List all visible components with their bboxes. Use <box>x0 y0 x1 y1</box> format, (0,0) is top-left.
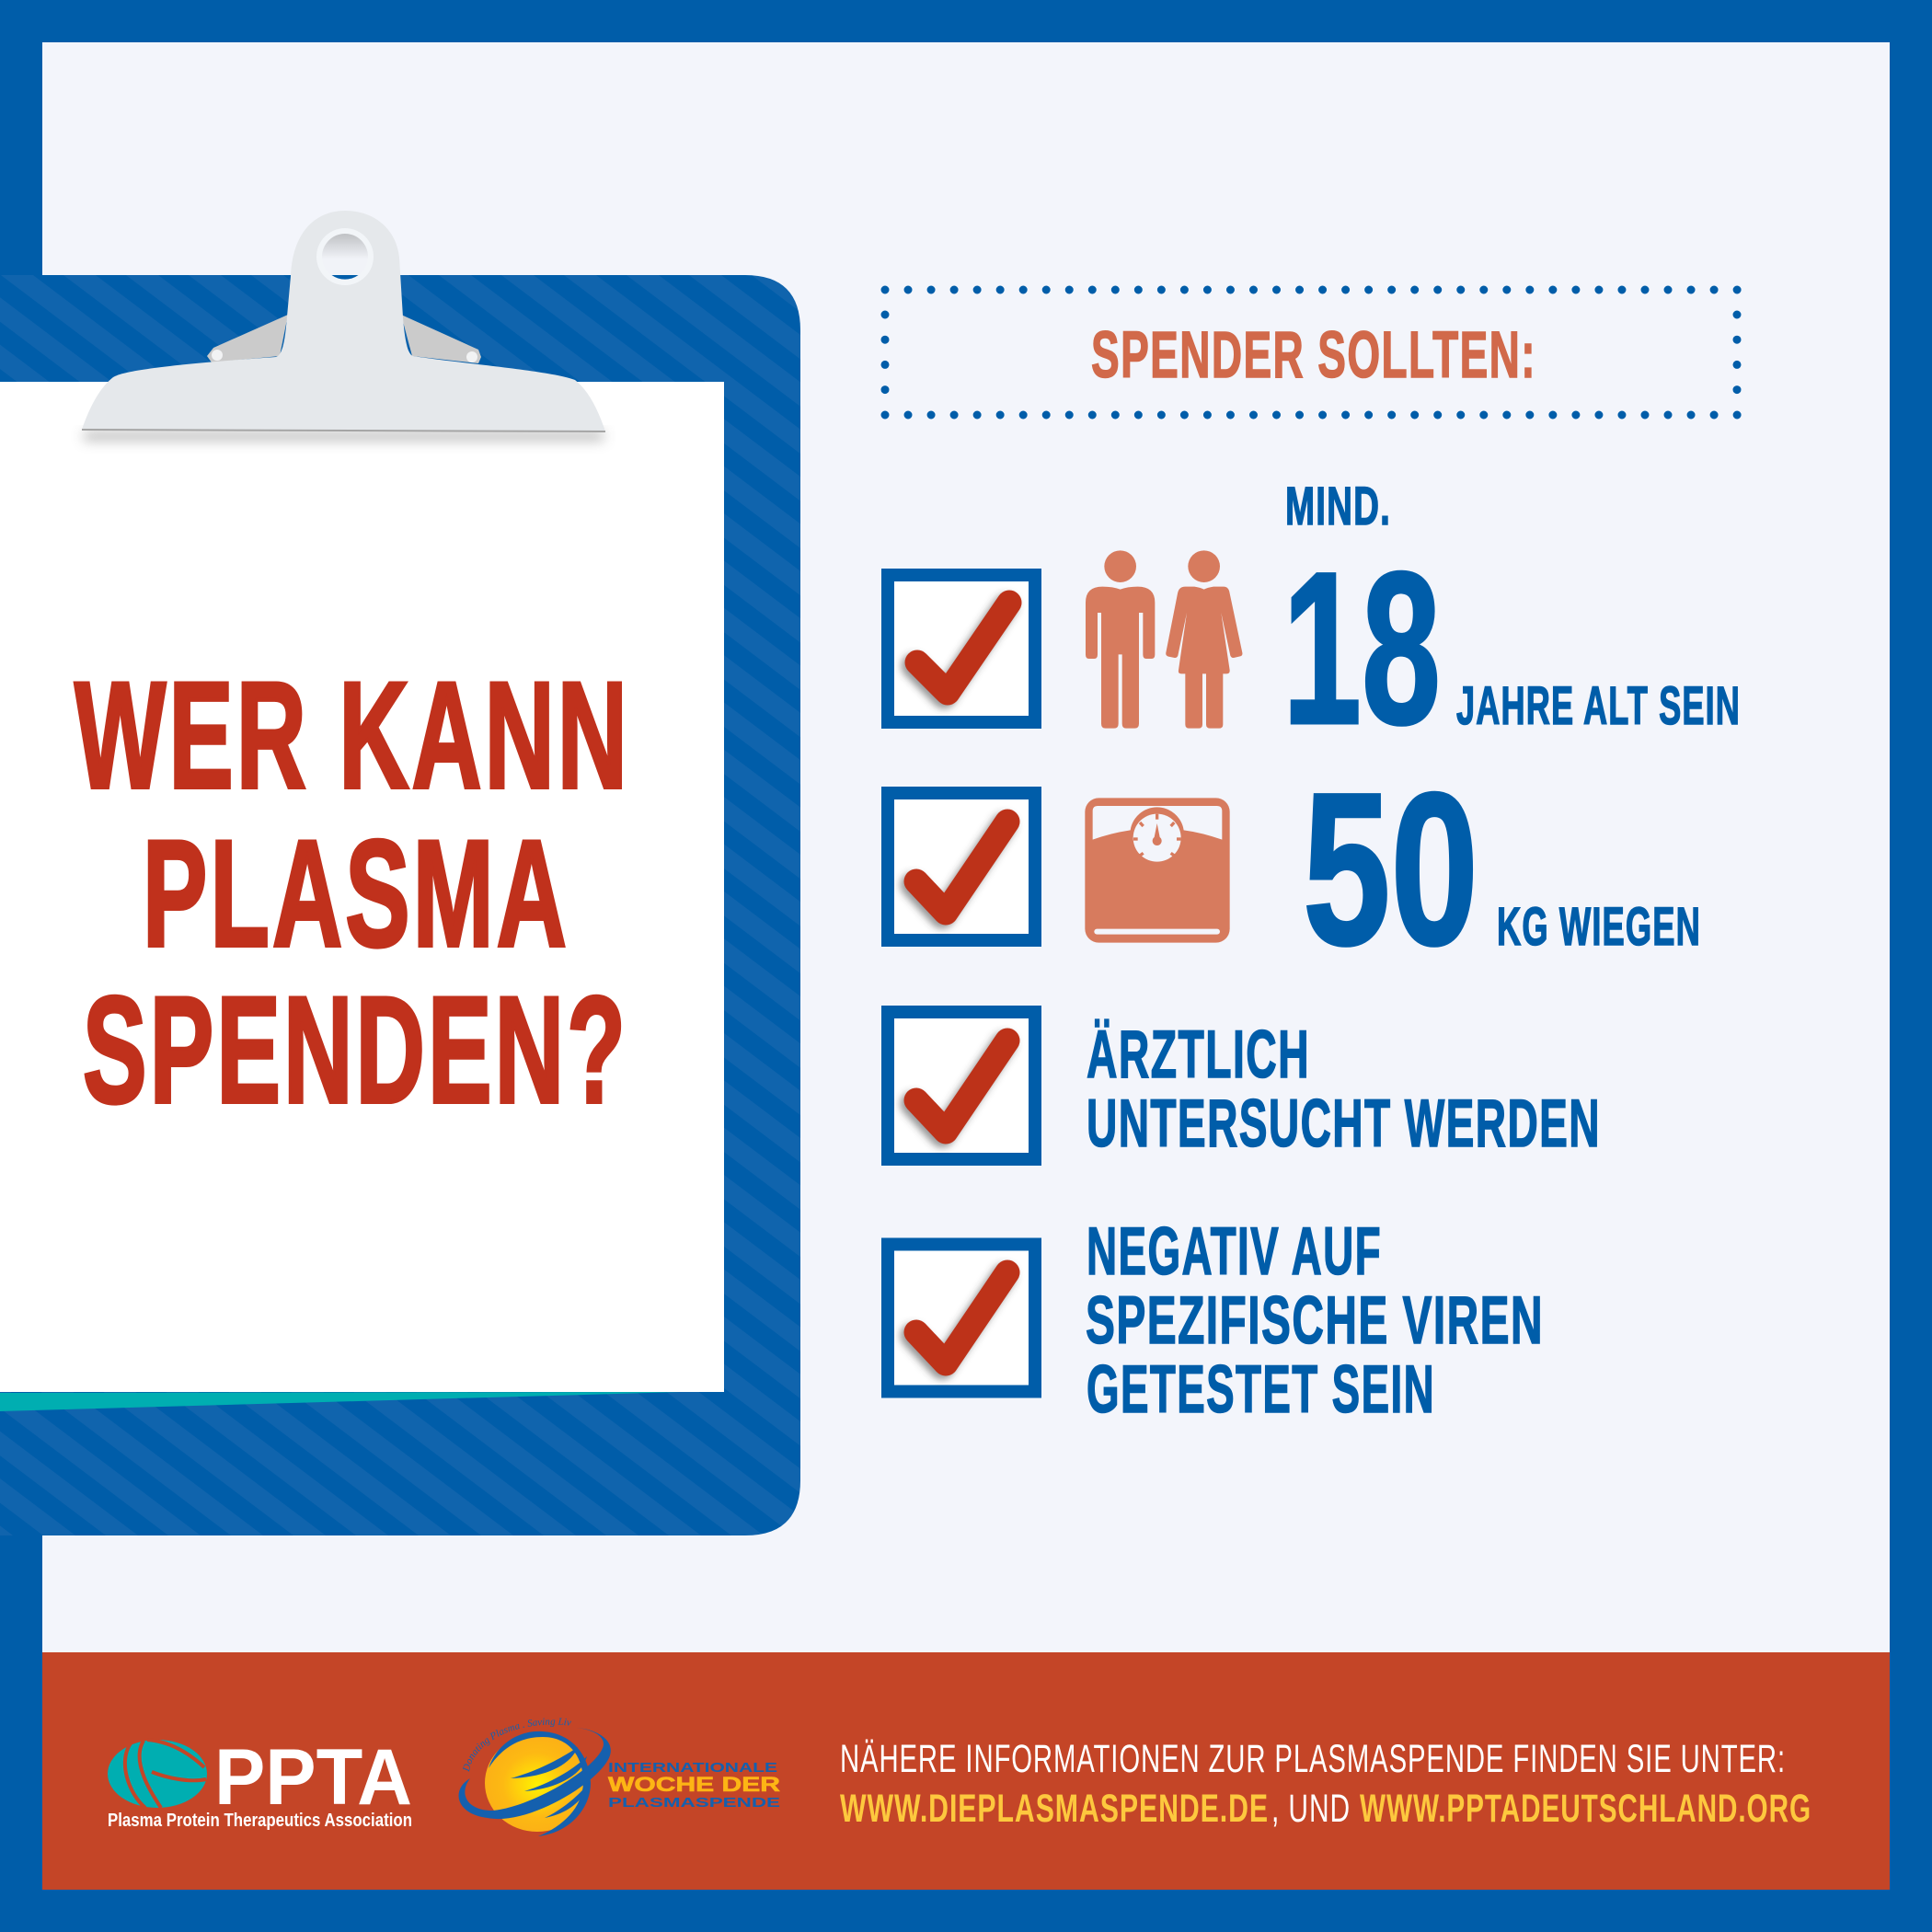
label: kg wiegen: KG WIEGEN <box>1497 897 1701 957</box>
icon: people <box>1086 550 1242 729</box>
text: ärztlich untersucht werden <box>1087 1018 1601 1161</box>
checkbox 3 <box>888 1012 1035 1159</box>
text: negativ auf spezifische viren getestet sein: NEGATIV AUF <box>1087 1214 1382 1289</box>
text: ärztlich untersucht werden: UNTERSUCHT WERDEN <box>1087 1087 1601 1161</box>
checkbox 2 <box>888 793 1035 940</box>
text: negativ auf spezifische viren getestet sein: GETESTET SEIN <box>1087 1352 1435 1427</box>
label: mind.: MIND. <box>1285 477 1391 536</box>
logo wordmark: INTERNATIONALE <box>608 1760 777 1776</box>
globe with orbit <box>459 1728 611 1836</box>
icon: scale <box>1085 798 1230 943</box>
item 3: examination <box>888 1012 1601 1161</box>
tagline on arc: Donating Plasma . Saving Lives <box>463 1719 571 1772</box>
logo: PPTA <box>108 1733 412 1831</box>
text: negativ auf spezifische viren getestet sein: SPEZIFISCHE VIREN <box>1086 1283 1544 1358</box>
logo wordmark: PLASMASPENDE <box>608 1796 780 1811</box>
logo: Internationale Woche der Plasmaspende <box>458 1719 780 1836</box>
logo wordmark: WOCHE DER <box>608 1773 780 1796</box>
clipboard board with stripes <box>0 275 800 1535</box>
checkbox 4 <box>888 1244 1035 1391</box>
title: PLASMA <box>143 809 569 978</box>
clip <box>82 211 605 440</box>
item 2: weight <box>888 748 1701 991</box>
number 18: 18 <box>1282 527 1441 770</box>
item 4: virus test <box>888 1214 1544 1427</box>
PPTA wordmark: PPTA <box>214 1733 412 1822</box>
PPTA globe mark <box>108 1740 207 1808</box>
checkbox 1 <box>888 575 1035 722</box>
clipboard paper <box>0 382 724 1392</box>
footer text: more information: , UND <box>1271 1787 1351 1831</box>
item 1: age <box>888 477 1741 770</box>
title: WER KANN <box>75 650 630 820</box>
label: jahre alt sein: JAHRE ALT SEIN <box>1456 676 1741 736</box>
heading: SPENDER SOLLTEN: <box>1091 319 1536 392</box>
logo wordmark <box>608 1760 780 1811</box>
PPTA full name: Plasma Protein Therapeutics Association <box>108 1811 412 1831</box>
footer text: more information <box>840 1737 1811 1831</box>
title <box>75 650 630 1134</box>
text: ärztlich untersucht werden: ÄRZTLICH <box>1087 1018 1310 1092</box>
panel: clipboard <box>0 211 800 1535</box>
dotted border <box>885 290 1738 415</box>
teal sliver <box>0 1392 681 1411</box>
title: SPENDEN? <box>83 965 628 1134</box>
text: negativ auf spezifische viren getestet sein <box>1086 1214 1544 1427</box>
footer text: more information: WWW.DIEPLASMASPENDE.DE <box>840 1787 1269 1831</box>
number 50: 50 <box>1303 748 1478 991</box>
